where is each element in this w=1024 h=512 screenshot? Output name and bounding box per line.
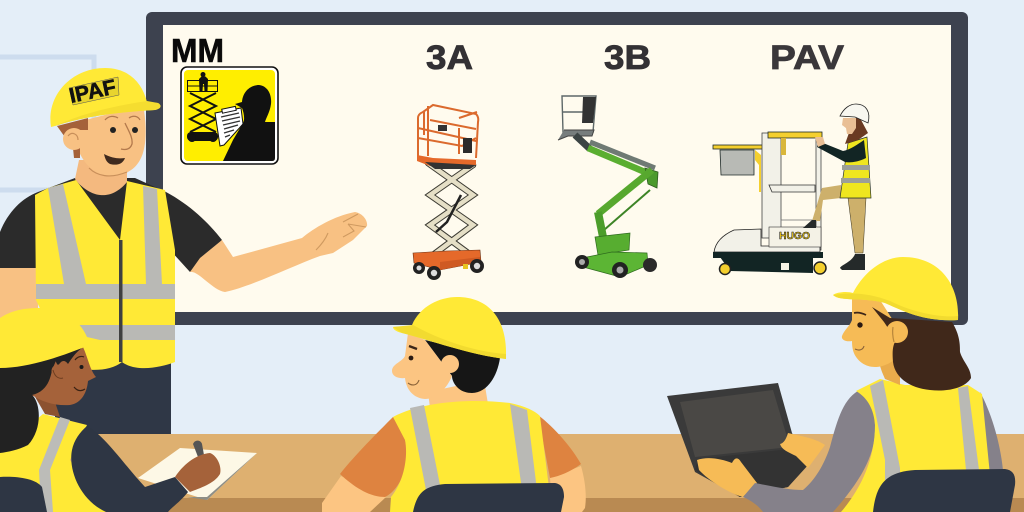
presenter bbox=[0, 68, 367, 434]
hands bbox=[697, 458, 757, 497]
presenter head bbox=[77, 105, 146, 176]
heading: MM: MM bbox=[171, 32, 224, 69]
worker chair bbox=[0, 477, 47, 512]
hair bbox=[872, 307, 971, 390]
presenter left arm bbox=[0, 262, 38, 350]
laptop bbox=[667, 383, 808, 497]
scissor arms bbox=[428, 163, 473, 255]
chassis bbox=[595, 233, 630, 255]
basket bbox=[562, 96, 596, 132]
presenter t-shirt bbox=[0, 178, 222, 272]
heading: 3A: 3A bbox=[426, 39, 473, 77]
heading: PAV: PAV bbox=[770, 39, 844, 77]
heading: 3B: 3B bbox=[604, 39, 651, 77]
sleeves bbox=[340, 415, 581, 497]
illustration: 3B boom lift bbox=[558, 96, 658, 278]
tool tray bbox=[713, 145, 763, 149]
hard hat bbox=[833, 257, 958, 320]
worker vest bbox=[0, 414, 108, 512]
desk bbox=[0, 434, 1024, 512]
worker in centre seen from behind bbox=[322, 297, 586, 512]
mast bbox=[762, 133, 781, 238]
presenter hard hat with IPAF logo: IPAF bbox=[67, 76, 118, 108]
writing hand bbox=[175, 453, 221, 492]
presentation screen bbox=[146, 12, 968, 325]
wheels bbox=[413, 262, 425, 274]
base bbox=[413, 250, 481, 270]
operator arm bbox=[817, 140, 866, 162]
neck bbox=[878, 360, 900, 385]
presenter hi-vis vest bbox=[35, 180, 175, 370]
presenter neck bbox=[75, 160, 127, 195]
face bbox=[392, 333, 452, 399]
operator vest bbox=[840, 137, 871, 198]
neck bbox=[428, 380, 488, 408]
presenter trousers bbox=[55, 360, 171, 434]
presenter hard hat with IPAF logo bbox=[50, 68, 161, 127]
worker on right with laptop bbox=[667, 257, 1015, 512]
operator legs bbox=[812, 185, 841, 221]
face bbox=[842, 298, 896, 367]
hard hat bbox=[393, 297, 506, 359]
notepad bbox=[138, 448, 257, 500]
basket bbox=[418, 105, 478, 158]
hair bbox=[425, 340, 500, 393]
worker sleeve bbox=[71, 426, 188, 512]
arm bbox=[743, 391, 1003, 512]
arms bbox=[322, 466, 586, 512]
vest bbox=[390, 401, 552, 512]
presenter right arm bbox=[190, 212, 367, 292]
worker neck and head bbox=[34, 395, 60, 417]
worker hard hat bbox=[0, 308, 100, 368]
worker hair bbox=[0, 352, 60, 453]
base bbox=[714, 229, 820, 252]
illustration: PAV HUGO lift with operator bbox=[713, 104, 871, 274]
pen bbox=[193, 441, 204, 457]
chair bbox=[873, 469, 1015, 512]
operator head bbox=[845, 118, 868, 144]
upper boom bbox=[590, 142, 655, 168]
icon: mobile manual sign bbox=[181, 67, 278, 164]
HUGO badge: HUGO bbox=[779, 231, 810, 242]
lower boom bbox=[598, 170, 652, 214]
chair bbox=[413, 483, 564, 512]
illustration: 3A scissor lift bbox=[413, 105, 484, 280]
vest bbox=[841, 379, 990, 512]
worker on left taking notes bbox=[0, 308, 257, 512]
